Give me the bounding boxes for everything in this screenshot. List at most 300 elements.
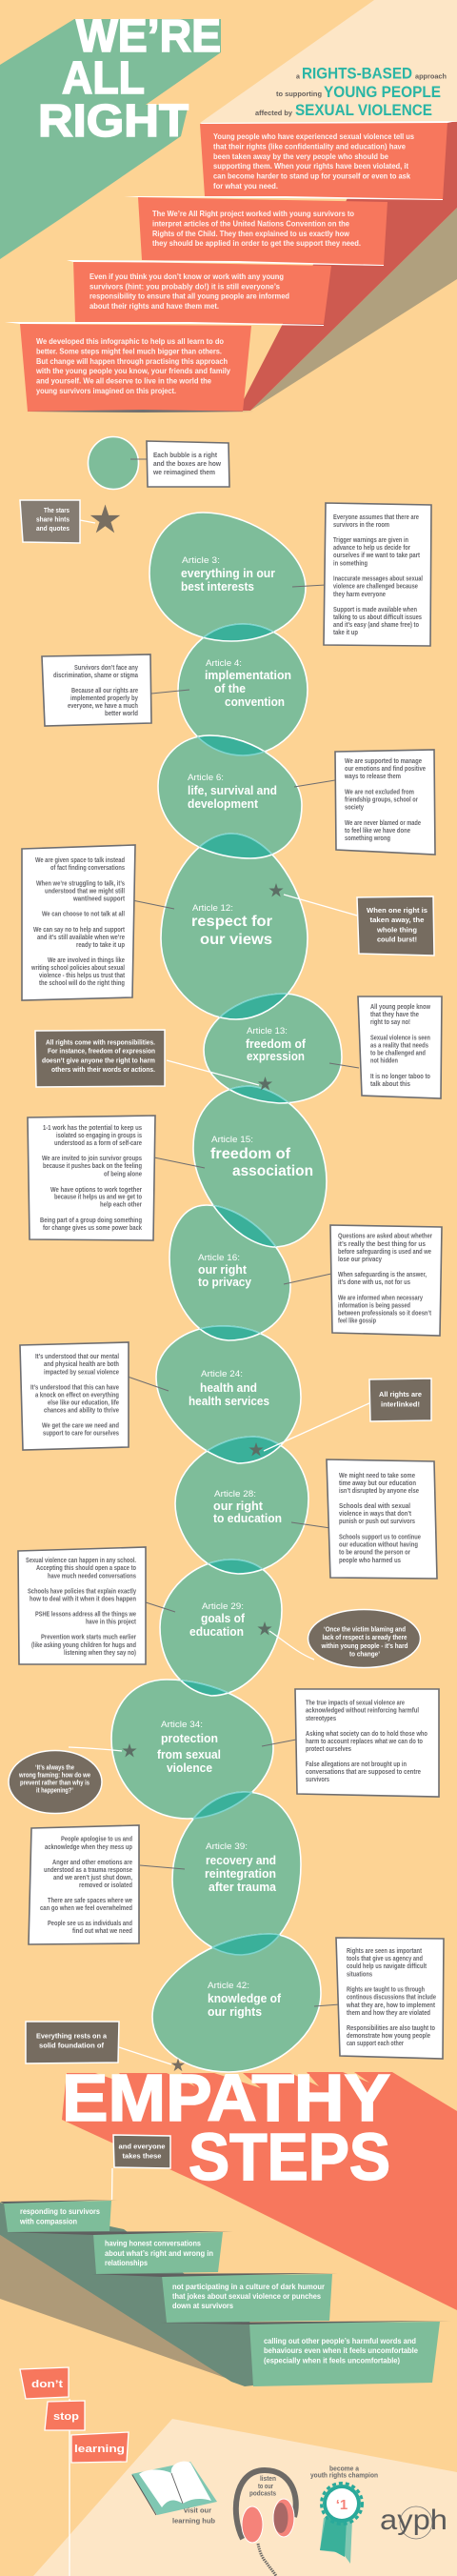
callout: all rights are interlinked: All rights are bbox=[379, 1390, 422, 1399]
box: article 28: Schools deal with sexual bbox=[339, 1503, 410, 1510]
box: article 12: When we’re struggling to talk, it’s bbox=[36, 880, 125, 888]
step: responding to survivors: with compassion bbox=[19, 2218, 77, 2225]
step 2: interpret articles of the United Nations Convention on the bbox=[152, 219, 349, 229]
box: article 3: and it’s easy (and shame free) to bbox=[333, 622, 419, 629]
quote: wrong framing: ‘It’s always the bbox=[35, 1762, 74, 1772]
bubble: article 39: reintegration bbox=[205, 1867, 276, 1881]
quote: victim blaming bbox=[269, 1610, 421, 1667]
callout: rights come with responsibilities: For instance, freedom of expression bbox=[48, 1046, 155, 1056]
flag: stop bbox=[45, 2401, 85, 2430]
box: article 12: We are given space to talk instead bbox=[35, 857, 125, 864]
box: article 16: When safeguarding is the answer, bbox=[338, 1272, 427, 1278]
box: article 6: society bbox=[345, 804, 364, 812]
bubble: article 28: Article 28: bbox=[214, 1489, 256, 1499]
box: article 34: stereotypes bbox=[306, 1716, 336, 1722]
flag: don't bbox=[20, 2367, 69, 2399]
bubble: article 4: implementation bbox=[205, 669, 291, 682]
step: honest conversations: relationships bbox=[105, 2259, 148, 2267]
bubble: article 16: to privacy bbox=[198, 1276, 251, 1289]
box: article 4: Survivors don’t face any bbox=[74, 665, 138, 672]
callout: when one right is taken away bbox=[284, 895, 434, 956]
title: RIGHT bbox=[38, 96, 189, 147]
box: article 29: have in this project bbox=[86, 1620, 137, 1625]
subtitle bbox=[255, 65, 447, 119]
quote: victim blaming: to change’ bbox=[349, 1650, 380, 1658]
step: calling out: (especially when it feels uncomfortable) bbox=[264, 2357, 400, 2365]
bubble: article 3 bbox=[149, 513, 306, 641]
box: article 13: that they have the bbox=[370, 1012, 419, 1018]
connector to steps bbox=[110, 2168, 113, 2200]
quote: wrong framing: wrong framing: how do we bbox=[18, 1770, 90, 1780]
box: article 29: Schools have policies that explain exactly bbox=[28, 1589, 136, 1595]
bubble: article 15: Article 15: bbox=[211, 1135, 253, 1145]
box: article 24: else like our education, life bbox=[48, 1400, 119, 1406]
box: article 15: We have options to work together bbox=[50, 1187, 142, 1194]
bubble: article 42: Article 42: bbox=[208, 1981, 249, 1991]
box: article 39: and we aren’t just shut down, bbox=[53, 1875, 132, 1882]
step: dark humour: down at survivors bbox=[172, 2302, 234, 2310]
label: learning hub: visit our bbox=[184, 2506, 211, 2515]
bubble: article 6: development bbox=[188, 797, 259, 811]
bubble: article 42: knowledge of bbox=[208, 1992, 282, 2005]
callout: when one right is taken away: could burst! bbox=[377, 936, 417, 943]
bubble: article 15: freedom of bbox=[210, 1146, 291, 1162]
step 1: been taken away by the very people who should be bbox=[213, 152, 388, 161]
label: champion bbox=[310, 2464, 378, 2479]
box: article 4: better world bbox=[105, 711, 138, 717]
title shadow bbox=[0, 19, 221, 259]
box: article 34: conversations that are supposed to centre bbox=[306, 1769, 421, 1776]
box: article 15: Being part of a group doing something bbox=[40, 1218, 142, 1224]
callout: when one right is taken away: taken away, the bbox=[369, 916, 425, 924]
footer panel bbox=[33, 2419, 457, 2576]
icon: rosette bbox=[320, 2483, 362, 2564]
step 3: about their rights and have them met. bbox=[89, 302, 219, 311]
bubble: article 34: Article 34: bbox=[161, 1720, 203, 1730]
callout: and everyone takes these bbox=[113, 2135, 170, 2168]
step 1: for what you need. bbox=[213, 182, 278, 191]
callout: rights come with responsibilities: others with their words or actions. bbox=[51, 1065, 155, 1074]
box: article 15: help each other bbox=[100, 1202, 142, 1208]
box: article 42: situations bbox=[347, 1972, 372, 1978]
heading: empathy steps: EMPATHY bbox=[62, 2061, 390, 2135]
quote: victim blaming: within young people - it’s hard bbox=[321, 1641, 408, 1650]
box: article 42: Rights are taught to us through bbox=[347, 1987, 425, 1993]
legend bubble bbox=[88, 436, 139, 490]
light header wedge bbox=[200, 0, 457, 123]
callout: all rights are interlinked: interlinked! bbox=[381, 1400, 420, 1408]
box: article 4: everyone, we have a much bbox=[68, 703, 138, 710]
box: article 42: could help us navigate difficult bbox=[347, 1963, 427, 1970]
callout: everything rests on: Everything rests on a bbox=[36, 2031, 108, 2041]
callout: and everyone takes these: takes these bbox=[122, 2151, 162, 2161]
bubble: article 28: to education bbox=[213, 1512, 282, 1525]
subtitle: to supporting bbox=[276, 91, 322, 98]
box: article 28 bbox=[291, 1459, 437, 1579]
step 4: young survivors imagined on this project. bbox=[36, 387, 176, 395]
flag pole bbox=[69, 2399, 70, 2576]
box: article 29: Accepting this should open a space to bbox=[36, 1565, 136, 1572]
step 1: can become harder to stand up for yourself or even to ask bbox=[213, 171, 410, 181]
box: article 28: time away but our education bbox=[339, 1480, 416, 1487]
label: podcasts: podcasts bbox=[249, 2488, 276, 2498]
step: dark humour: not participating in a culture of dark humour bbox=[172, 2283, 325, 2291]
subtitle: approach bbox=[415, 74, 447, 80]
box: article 24: support to care for ourselves bbox=[43, 1431, 119, 1437]
box: article 24: impacted by sexual violence bbox=[44, 1370, 119, 1376]
box: article 39: removed or isolated bbox=[79, 1882, 132, 1889]
box: article 28: our education without having bbox=[339, 1541, 418, 1549]
icon: star on article 12 bbox=[268, 883, 284, 896]
bubble: article 39: recovery and bbox=[206, 1854, 276, 1867]
step: dark humour bbox=[92, 2273, 338, 2323]
box: article 16: it’s really the best thing for us bbox=[338, 1241, 426, 1248]
box: article 12: We are involved in things like bbox=[48, 957, 125, 964]
box: article 39 bbox=[29, 1825, 185, 1944]
box: article 15: for change gives us some power back bbox=[43, 1225, 142, 1232]
bubble: article 15: association bbox=[232, 1163, 313, 1179]
bubble: article 29: goals of bbox=[201, 1612, 246, 1625]
step: responding to survivors: responding to survivors bbox=[20, 2207, 100, 2216]
label: champion: become a bbox=[329, 2464, 360, 2473]
icon: star on article 13 bbox=[258, 1077, 272, 1090]
subtitle: a bbox=[296, 74, 300, 80]
bubble: article 6: life, survival and bbox=[188, 784, 277, 797]
box: article 29: (like asking young children for hugs and bbox=[31, 1642, 136, 1649]
bubble: article 15 bbox=[192, 1085, 328, 1248]
title bbox=[38, 11, 221, 147]
step: dark humour: that jokes about sexual violence or punches bbox=[172, 2292, 322, 2301]
icon: rosette: ‘1 bbox=[336, 2497, 348, 2513]
box: article 6: something wrong bbox=[345, 835, 390, 842]
bubble: article 28 bbox=[174, 1436, 309, 1570]
step 2 bbox=[124, 196, 443, 265]
bubble: article 6 bbox=[157, 735, 303, 855]
box: article 34: protect ourselves bbox=[306, 1746, 351, 1753]
legend box: we reimagined them bbox=[152, 470, 215, 476]
box: article 3: Everyone assumes that there are bbox=[333, 514, 419, 521]
step 1: that their rights (like confidentiality and education) have bbox=[213, 143, 406, 151]
box: article 28: punish or push out survivors bbox=[339, 1519, 415, 1525]
bubble: article 4: convention bbox=[225, 695, 285, 709]
quote: wrong framing: prevent rather than why is bbox=[20, 1778, 89, 1787]
step: honest conversations: about what’s right and wrong in bbox=[105, 2249, 213, 2258]
box: article 29 bbox=[18, 1547, 175, 1664]
label: podcasts: to our bbox=[258, 2482, 273, 2490]
box: article 13: not hidden bbox=[370, 1057, 398, 1065]
bubble: article 12: Article 12: bbox=[192, 903, 233, 914]
box: article 39: can go when we feel overwhelmed bbox=[40, 1905, 132, 1912]
callout: all rights are interlinked bbox=[264, 1379, 431, 1451]
callout: everything rests on: solid foundation of bbox=[39, 2041, 104, 2050]
logo: ayph: ayph bbox=[380, 2505, 447, 2536]
box: article 15: understood as a form of self-care bbox=[54, 1140, 142, 1147]
subtitle: SEXUAL VIOLENCE bbox=[295, 101, 432, 119]
bubble: article 39: Article 39: bbox=[206, 1841, 248, 1852]
icon: headphones bbox=[236, 2470, 296, 2576]
bubble: article 42 bbox=[151, 1933, 322, 2073]
icon: star on article 34 bbox=[122, 1743, 137, 1757]
bubble: article 16: our right bbox=[198, 1263, 248, 1277]
step 3: responsibility to ensure that all young people are informed bbox=[89, 292, 289, 301]
bubble: article 24: health and bbox=[200, 1381, 257, 1395]
box: article 13: talk about this bbox=[370, 1081, 410, 1088]
box: article 6: ways to release them bbox=[344, 774, 401, 780]
box: article 29: how to deal with it when it does happen bbox=[30, 1597, 136, 1602]
box: article 28: We might need to take some bbox=[339, 1473, 415, 1479]
box: article 13: to be challenged and bbox=[370, 1050, 426, 1057]
box: article 39: acknowledge when they mess up bbox=[45, 1844, 132, 1851]
box: article 15 bbox=[28, 1116, 205, 1240]
step: calling out: behaviours even when it feels uncomfortable bbox=[264, 2346, 419, 2355]
box: article 12: We can say no to help and support bbox=[33, 927, 126, 934]
step 2: Rights of the Child. They then explained to us exactly how bbox=[152, 230, 350, 238]
bubble: article 29: education bbox=[189, 1625, 244, 1639]
callout: when one right is taken away: whole thing bbox=[376, 926, 417, 934]
box: article 4: implemented properly by bbox=[70, 695, 138, 702]
icon: legend star bbox=[90, 505, 120, 533]
box: article 16: lose our privacy bbox=[338, 1257, 382, 1263]
box: article 13: All young people know bbox=[370, 1004, 430, 1011]
box: article 16: information is being passed bbox=[338, 1303, 410, 1309]
bubble: article 28: our right bbox=[213, 1499, 264, 1513]
bubble: article 34 bbox=[110, 1679, 274, 1820]
bubble: article 13: freedom of bbox=[246, 1037, 307, 1051]
quote: wrong framing bbox=[9, 1747, 122, 1814]
step 4: We developed this infographic to help us all learn to do bbox=[36, 337, 224, 346]
empathy steps shadow bbox=[62, 2072, 457, 2310]
box: article 3: they harm everyone bbox=[333, 592, 386, 598]
step 3: survivors (hint: you probably do!) it is still everyone’s bbox=[89, 282, 280, 292]
box: article 39: Anger and other emotions are bbox=[52, 1860, 132, 1866]
green stairs dark side bbox=[0, 2203, 253, 2386]
box: article 12: and it’s still available when we’re bbox=[37, 935, 125, 941]
box: article 28: people who harmed us bbox=[339, 1558, 401, 1564]
box: article 39: find out what we need bbox=[72, 1928, 132, 1935]
stars legend box: share hints bbox=[36, 514, 70, 524]
bubble: article 3: best interests bbox=[181, 580, 254, 594]
bubble: article 13: expression bbox=[247, 1050, 305, 1063]
step: honest conversations: having honest conversations bbox=[105, 2239, 201, 2248]
box: article 39: People apologise to us and bbox=[61, 1837, 132, 1842]
icon: star foundation bbox=[171, 2058, 185, 2071]
box: article 24: chances and ability to thrive bbox=[44, 1408, 119, 1414]
callout: rights come with responsibilities bbox=[35, 1030, 259, 1087]
bubble: article 3: Article 3: bbox=[182, 555, 220, 566]
box: article 3: take it up bbox=[333, 630, 358, 636]
box: article 3 bbox=[292, 503, 431, 646]
box: article 3: survivors in the room bbox=[333, 522, 389, 529]
box: article 15: of being alone bbox=[104, 1172, 142, 1177]
label: champion: youth rights champion bbox=[310, 2471, 378, 2479]
box: article 28: to be around the person or bbox=[339, 1549, 410, 1557]
box: article 16: Questions are asked about whether bbox=[338, 1233, 432, 1240]
staircase tan shadow bbox=[250, 208, 457, 411]
step: responding to survivors bbox=[0, 2200, 118, 2232]
bubble: article 4: Article 4: bbox=[206, 658, 242, 669]
step: calling out: calling out other people’s harmful words and bbox=[264, 2337, 416, 2345]
callout: rights come with responsibilities: doesn’t give anyone the right to harm bbox=[42, 1056, 155, 1065]
quote: victim blaming: ‘Once the victim blaming and bbox=[324, 1625, 406, 1633]
subtitle: RIGHTS-BASED bbox=[302, 65, 412, 82]
bubble: article 16 bbox=[169, 1204, 291, 1334]
callout: rights come with responsibilities: All rights come with responsibilities. bbox=[46, 1038, 155, 1046]
step 2: The We’re All Right project worked with young survivors to bbox=[152, 210, 354, 218]
box: article 28: isn’t disrupted by anyone else bbox=[339, 1488, 419, 1495]
box: article 16: between professionals so it doesn’t bbox=[338, 1311, 432, 1317]
step: calling out bbox=[160, 2321, 451, 2386]
box: article 16: feel like gossip bbox=[338, 1318, 376, 1324]
icon: book bbox=[131, 2462, 217, 2515]
callout: when one right is taken away: When one right is bbox=[367, 906, 427, 915]
box: article 24: We get the care we need and bbox=[42, 1423, 119, 1429]
box: article 6 bbox=[294, 750, 435, 855]
box: article 6: to feel like we have done bbox=[345, 828, 410, 835]
box: article 29: PSHE lessons address all the things we bbox=[35, 1612, 136, 1618]
step 4 bbox=[5, 322, 324, 413]
box: article 12: writing school policies about sexual bbox=[30, 965, 125, 972]
step 2: they should be applied in order to get the support they need. bbox=[152, 239, 361, 248]
flag: stop: stop bbox=[53, 2411, 79, 2423]
box: article 15: because it helps us and we get to bbox=[54, 1195, 142, 1200]
green stairs tan shadow bbox=[0, 2235, 236, 2382]
box: article 3: in something bbox=[333, 560, 368, 568]
box: article 13: Sexual violence is seen bbox=[370, 1035, 430, 1042]
box: article 13: It is no longer taboo to bbox=[370, 1074, 430, 1080]
box: article 12 bbox=[22, 845, 174, 1000]
box: article 29: Sexual violence can happen in any school. bbox=[26, 1558, 136, 1564]
box: article 13 bbox=[329, 996, 442, 1098]
box: article 34: acknowledged without reinforcing harmful bbox=[306, 1707, 419, 1715]
box: article 3: advance to help us decide for bbox=[333, 545, 410, 552]
box: article 29: Prevention work starts much earlier bbox=[41, 1635, 136, 1640]
box: article 15: because it pushes back on the feeling bbox=[43, 1163, 142, 1170]
box: article 3: talking to us about difficult issues bbox=[333, 614, 422, 621]
box: article 16: before safeguarding is used and we bbox=[338, 1249, 431, 1256]
bubble: article 24: Article 24: bbox=[201, 1369, 243, 1379]
legend box: Each bubble is a right bbox=[153, 453, 218, 459]
title: WE’RE bbox=[76, 11, 221, 62]
box: article 3: Inaccurate messages about sexual bbox=[333, 575, 423, 583]
heading: empathy steps: STEPS bbox=[189, 2120, 390, 2194]
box: article 6: our emotions and find positive bbox=[345, 766, 426, 773]
box: article 42: what they are, how to implement bbox=[346, 2002, 436, 2009]
box: article 42: continous discussions that include bbox=[347, 1995, 436, 2001]
callout: everything rests on bbox=[26, 2022, 171, 2064]
stars legend box: The stars bbox=[44, 506, 70, 514]
box: article 12: violence - this helps us trust that bbox=[39, 973, 126, 979]
box: article 28: violence in ways that don’t bbox=[339, 1511, 412, 1518]
box: article 4 bbox=[42, 654, 189, 726]
box: article 28: Schools support us to continue bbox=[339, 1534, 421, 1541]
bubble: article 6: Article 6: bbox=[188, 773, 224, 783]
box: article 12: want/need support bbox=[72, 896, 126, 903]
bubble: article 12: our views bbox=[200, 932, 272, 948]
box: article 24 bbox=[20, 1342, 169, 1450]
step 4: better. Some steps might feel much bigger than others. bbox=[36, 347, 222, 356]
box: article 16: We are informed when necessary bbox=[338, 1296, 423, 1301]
box: article 42: tools that give us agency and bbox=[347, 1956, 423, 1962]
box: article 42: Rights are seen as important bbox=[347, 1948, 423, 1955]
label: learning hub bbox=[172, 2506, 215, 2525]
box: article 15: isolated so engaging in groups is bbox=[56, 1133, 142, 1139]
bubble: article 34: protection bbox=[161, 1732, 218, 1745]
legend box: and the boxes are how bbox=[153, 461, 222, 468]
bubble: article 34: from sexual bbox=[157, 1748, 221, 1761]
box: article 42: them and how they are violated bbox=[347, 2010, 430, 2017]
bubble: article 29: Article 29: bbox=[202, 1601, 244, 1612]
bubble: article 39 bbox=[171, 1791, 302, 1947]
box: article 12: ready to take it up bbox=[76, 942, 125, 949]
box: article 24: a knock on effect on everything bbox=[35, 1393, 119, 1399]
box: article 15: We are invited to join survivor groups bbox=[42, 1156, 142, 1162]
box: article 34: Asking what society can do to hold those who bbox=[306, 1731, 427, 1738]
box: article 39: People see us as individuals and bbox=[48, 1921, 132, 1927]
box: article 12: understood that we might still bbox=[45, 888, 125, 896]
box: article 16 bbox=[284, 1225, 442, 1336]
title: ALL bbox=[62, 53, 145, 104]
bubble: article 39: after trauma bbox=[209, 1881, 277, 1894]
box: article 15: 1-1 work has the potential to keep us bbox=[43, 1125, 142, 1132]
flag: learning bbox=[71, 2432, 129, 2463]
bubble: article 16: Article 16: bbox=[198, 1253, 240, 1263]
step 3: Even if you think you don’t know or work with any young bbox=[89, 272, 284, 281]
step 1: supporting them. When your rights have been violated, it bbox=[213, 162, 408, 171]
box: article 3: Support is made available when bbox=[333, 607, 417, 614]
quote: victim blaming: lack of respect is aready there bbox=[322, 1633, 407, 1641]
bubble: article 13 bbox=[203, 993, 343, 1103]
box: article 12: We can choose to not talk at all bbox=[42, 911, 125, 918]
step 1: Young people who have experienced sexual violence tell us bbox=[213, 132, 414, 141]
box: article 6: friendship groups, school or bbox=[345, 796, 418, 804]
step 3 bbox=[67, 260, 384, 324]
box: article 34: survivors bbox=[306, 1777, 329, 1783]
step 1 bbox=[200, 121, 457, 200]
heading: empathy steps bbox=[62, 2061, 390, 2194]
quote: wrong framing: it happening?’ bbox=[36, 1785, 73, 1795]
box: article 6: We are never blamed or made bbox=[345, 820, 421, 827]
bubble: article 13: Article 13: bbox=[247, 1026, 288, 1036]
box: article 24: and physical health are both bbox=[44, 1361, 119, 1368]
bubble: article 4: of the bbox=[214, 682, 246, 695]
subtitle: affected by bbox=[255, 111, 292, 117]
box: article 24: It’s understood that our mental bbox=[35, 1354, 119, 1360]
icon: star on article 24 bbox=[248, 1442, 264, 1456]
box: article 3: ourselves if we want to take part bbox=[333, 553, 421, 559]
box: article 29: have much needed conversations bbox=[48, 1574, 136, 1580]
box: article 42 bbox=[314, 1938, 444, 2059]
box: article 39: There are safe spaces where we bbox=[48, 1898, 132, 1904]
bubble: article 3: everything in our bbox=[181, 567, 275, 580]
box: article 34: The true impacts of sexual violence are bbox=[306, 1700, 405, 1707]
box: article 4: discrimination, shame or stigma bbox=[53, 673, 138, 679]
box: article 34: harm to account replaces what we can do to bbox=[306, 1739, 423, 1745]
step: honest conversations bbox=[8, 2231, 233, 2274]
stars legend box bbox=[20, 500, 95, 543]
box: article 24: It’s understood that this can have bbox=[30, 1385, 119, 1391]
label: podcasts bbox=[249, 2474, 276, 2498]
box: article 6: We are supported to manage bbox=[345, 758, 422, 765]
stars legend box: and quotes bbox=[36, 524, 70, 533]
box: article 12: of fact finding conversations bbox=[50, 865, 125, 872]
bubble: article 12 bbox=[160, 833, 308, 1017]
bubble: article 24: health services bbox=[189, 1395, 269, 1408]
staircase dark side bbox=[238, 122, 457, 411]
box: article 13: as a reality that needs bbox=[370, 1042, 428, 1050]
label: podcasts: listen bbox=[260, 2474, 276, 2483]
box: article 39: understood as a trauma response bbox=[44, 1867, 132, 1874]
box: article 3: violence are challenged because bbox=[333, 583, 418, 591]
